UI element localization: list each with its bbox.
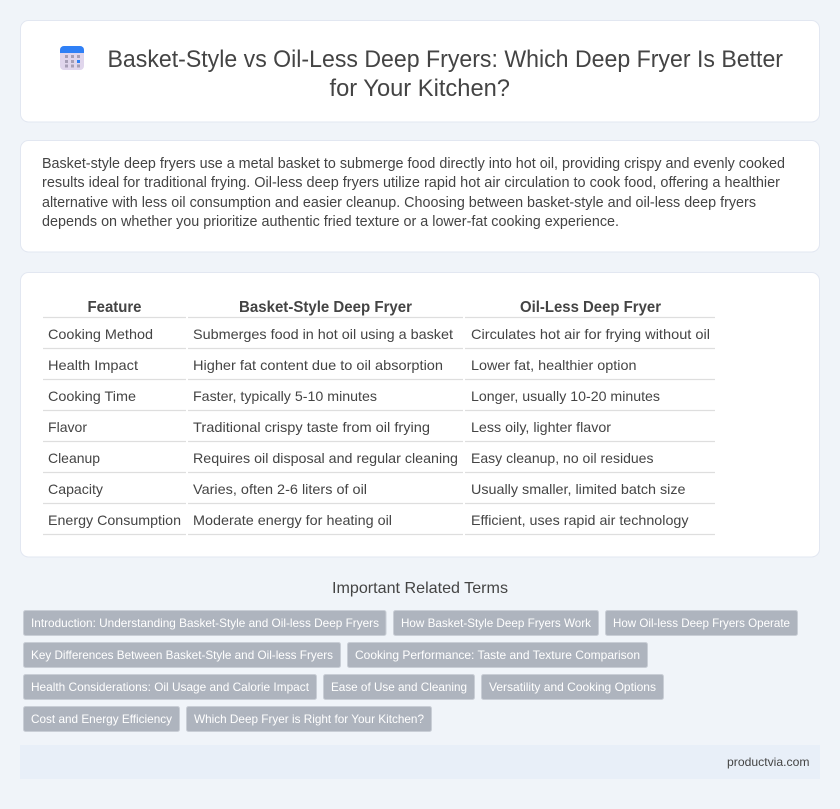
table row: cleanup: Requires oil disposal and regular cleaning xyxy=(193,450,458,466)
tag: Versatility and Cooking Options xyxy=(489,680,656,694)
table row: flavor: Traditional crispy taste from oil frying xyxy=(193,419,430,435)
tag xyxy=(24,674,316,700)
table row: health impact: Lower fat, healthier option xyxy=(471,357,636,373)
text block: introduction paragraph: alternative with less oil consumption and easier cleanup. Choosing between basket-style and oil-less deep fryers xyxy=(42,195,756,211)
table header: Oil-Less Deep Fryer xyxy=(520,299,661,316)
tag: Ease of Use and Cleaning xyxy=(331,680,467,694)
table header: Basket-Style Deep Fryer xyxy=(239,299,412,316)
tag xyxy=(606,610,798,636)
table row: health impact: Health Impact xyxy=(48,357,138,373)
tag: How Oil-less Deep Fryers Operate xyxy=(613,616,790,630)
tag xyxy=(394,610,598,636)
table row: energy consumption: Moderate energy for heating oil xyxy=(193,512,392,528)
table header xyxy=(88,299,661,316)
heading: for Your Kitchen? xyxy=(330,75,510,102)
table row: cooking method xyxy=(48,326,710,342)
table row: cooking method: Circulates hot air for frying without oil xyxy=(471,326,710,342)
text block: introduction paragraph: depends on whether you prioritize authentic fried texture or a lower-fat cooking experience. xyxy=(42,214,619,230)
tag xyxy=(348,642,648,668)
table row: cooking time xyxy=(48,388,660,404)
table row: cleanup: Easy cleanup, no oil residues xyxy=(471,450,654,466)
table row: flavor xyxy=(48,419,611,435)
table row: cleanup: Cleanup xyxy=(48,450,100,466)
table row: energy consumption xyxy=(48,512,688,528)
table row: capacity: Varies, often 2-6 liters of oil xyxy=(193,481,367,497)
tag xyxy=(24,610,386,636)
table row: flavor: Less oily, lighter flavor xyxy=(471,419,611,435)
text block: introduction paragraph: Basket-style deep fryers use a metal basket to submerge food directly into hot oil, providing crispy and evenly cooked xyxy=(42,156,785,172)
tag xyxy=(324,674,474,700)
table row: health impact xyxy=(48,357,636,373)
table row: capacity: Usually smaller, limited batch size xyxy=(471,481,686,497)
tag: Cooking Performance: Taste and Texture Comparison xyxy=(355,648,640,662)
tag xyxy=(24,642,340,668)
tag xyxy=(24,706,180,732)
tag: Introduction: Understanding Basket-Style and Oil-less Deep Fryers xyxy=(31,616,379,630)
table row: flavor: Flavor xyxy=(48,419,87,435)
heading: important related terms: Important Related Terms xyxy=(332,580,508,597)
table row: health impact: Higher fat content due to oil absorption xyxy=(193,357,443,373)
tag: Which Deep Fryer is Right for Your Kitchen? xyxy=(194,712,424,726)
table row: cooking time: Cooking Time xyxy=(48,388,136,404)
table row: capacity xyxy=(48,481,686,497)
table header: Feature xyxy=(88,299,142,316)
tag: Cost and Energy Efficiency xyxy=(31,712,172,726)
tag: Health Considerations: Oil Usage and Calorie Impact xyxy=(31,680,310,694)
tag: How Basket-Style Deep Fryers Work xyxy=(401,616,592,630)
tag xyxy=(482,674,664,700)
tag xyxy=(186,706,432,732)
tag: Key Differences Between Basket-Style and Oil-less Fryers xyxy=(31,648,333,662)
icon: calendar xyxy=(60,46,84,70)
table row: cooking time: Faster, typically 5-10 minutes xyxy=(193,388,377,404)
table row: cooking method: Cooking Method xyxy=(48,326,153,342)
table row: energy consumption: Efficient, uses rapid air technology xyxy=(471,512,688,528)
footer xyxy=(20,745,820,779)
text block: introduction paragraph: results ideal for traditional frying. Oil-less deep fryers utilize rapid hot air circulation to cook food, offering a healthier xyxy=(42,175,780,191)
panel: introduction xyxy=(20,140,820,252)
tags: related terms xyxy=(24,610,798,732)
table row: capacity: Capacity xyxy=(48,481,103,497)
panel: title xyxy=(20,20,820,122)
heading: Basket-Style vs Oil-Less Deep Fryers: Which Deep Fryer Is Better xyxy=(108,46,783,73)
panel: comparison table xyxy=(20,272,820,557)
table row: cooking time: Longer, usually 10-20 minutes xyxy=(471,388,660,404)
table row: cleanup xyxy=(48,450,654,466)
table row: energy consumption: Energy Consumption xyxy=(48,512,181,528)
table row: cooking method: Submerges food in hot oil using a basket xyxy=(193,326,453,342)
footer: productvia.com xyxy=(727,755,810,769)
